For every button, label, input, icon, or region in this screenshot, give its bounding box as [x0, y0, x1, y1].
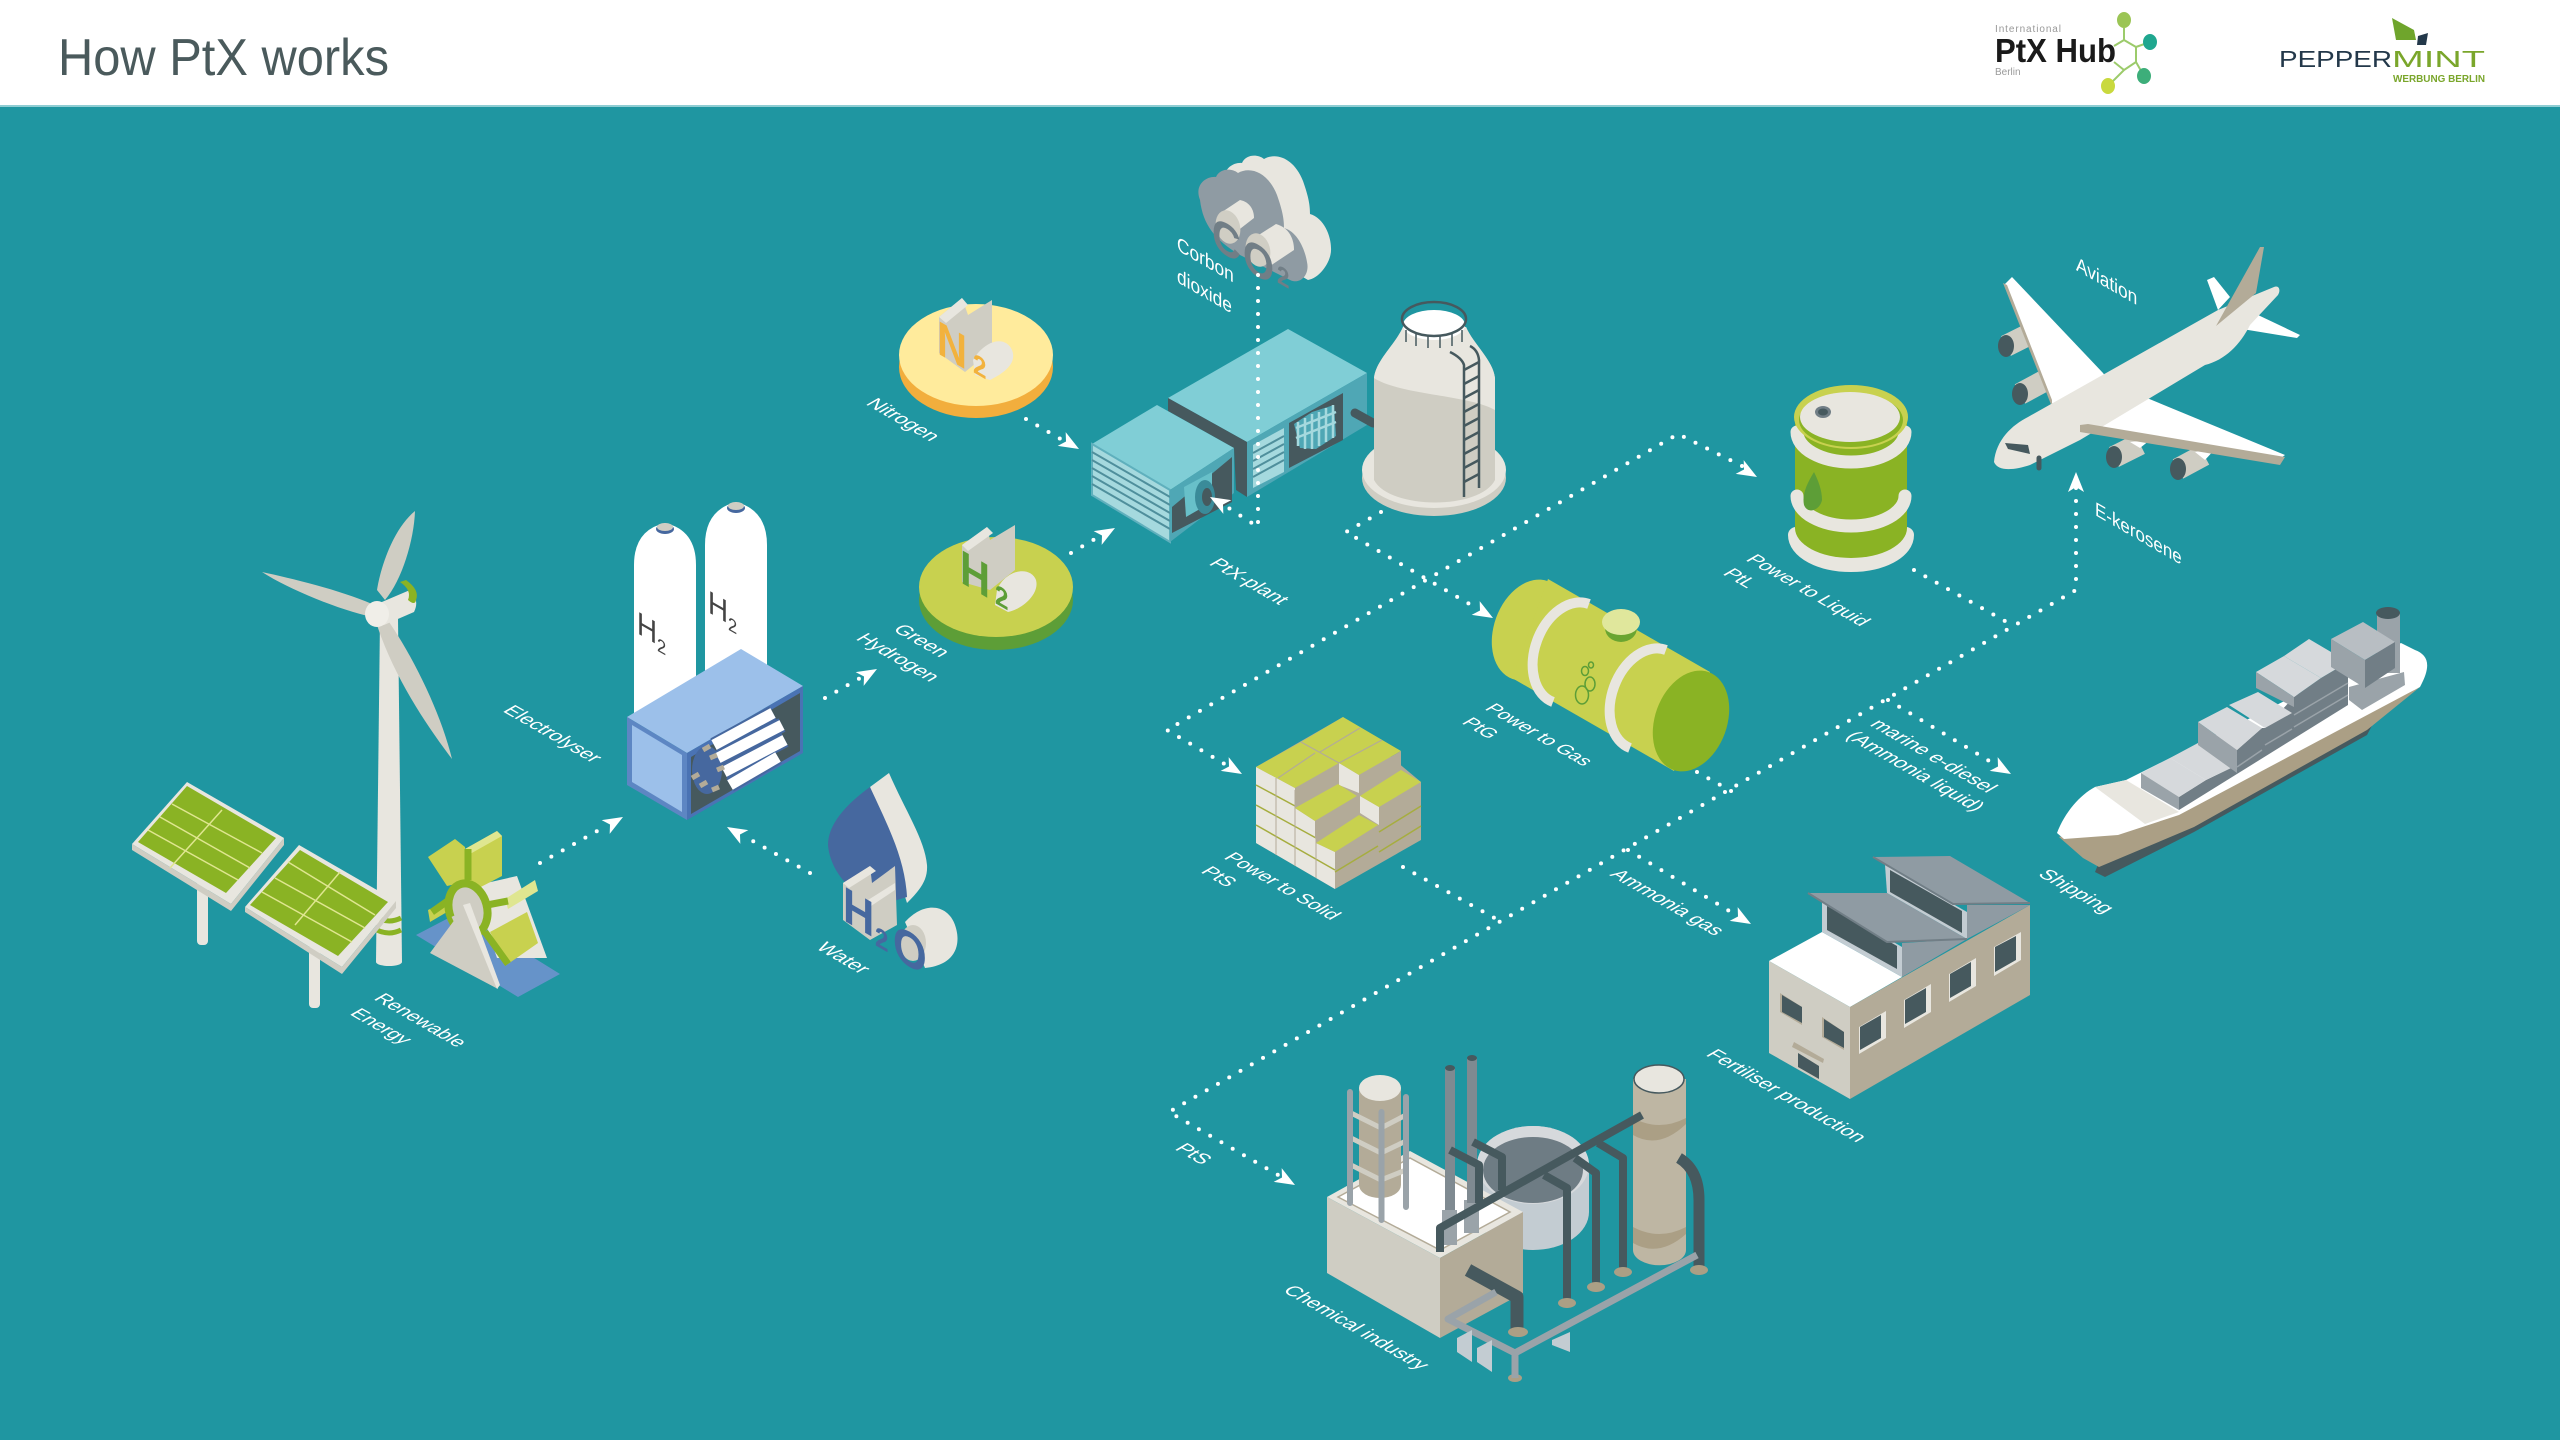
- icon: solid block cube: [1256, 717, 1421, 889]
- label: Carbon dioxide: [1177, 233, 1234, 319]
- icon: storage tank: [1362, 302, 1506, 516]
- label: PtX-plant: PtX-plant: [1204, 555, 1294, 608]
- icon: wind turbine: [262, 511, 452, 966]
- label: marine e-diesel (Ammonia liquid): (Ammonia liquid): [1841, 728, 1990, 814]
- icon: nitrogen disc: 2: [973, 347, 986, 386]
- icon: fertiliser factory: [1769, 856, 2030, 1099]
- icon: water drop H2O: [828, 773, 957, 987]
- icon: nitrogen disc: N: [937, 311, 967, 381]
- label: Renewable Energy: Renewable: [369, 990, 472, 1050]
- icon: nitrogen disc: [899, 298, 1053, 418]
- label: Power to Gas PtG: PtG: [1457, 715, 1503, 742]
- logo: Peppermint: WERBUNG BERLIN: [2393, 74, 2485, 85]
- label: Water: Water: [811, 939, 876, 977]
- icon: solar panel front: [245, 845, 396, 974]
- logo: PtX Hub: Berlin: [1995, 67, 2021, 78]
- icon: water wheel: [416, 831, 560, 997]
- label: Nitrogen: Nitrogen: [861, 395, 945, 444]
- label: Carbon dioxide: dioxide: [1177, 265, 1232, 319]
- label: Green Hydrogen: Hydrogen: [851, 630, 945, 685]
- icon: CO2 cloud: O: [1243, 226, 1274, 296]
- label: Power to Solid PtS: Power to Solid: [1219, 849, 1346, 923]
- label: Power to Solid PtS: PtS: [1196, 863, 1242, 890]
- icon: fuel barrel: [1794, 385, 1908, 564]
- icon: solar panels: [132, 782, 320, 1008]
- icon: green hydrogen disc: H: [960, 540, 990, 610]
- label: Green Hydrogen: Green: [888, 621, 955, 660]
- icon: water drop H2O: H: [843, 875, 874, 949]
- icon: airplane: [1994, 247, 2300, 480]
- icon: CO2 cloud: C: [1212, 205, 1241, 274]
- label: Shipping: Shipping: [2033, 866, 2119, 916]
- logo: Peppermint: [2279, 18, 2485, 85]
- logo: Peppermint: PEPPER: [2279, 46, 2392, 72]
- logo: Peppermint: MINT: [2392, 46, 2485, 72]
- label: Aviation: Aviation: [2076, 253, 2137, 310]
- logo: PtX Hub: [1995, 12, 2157, 94]
- flow: water to electrolyser: [723, 820, 810, 873]
- label: Ammonia gas: Ammonia gas: [1605, 866, 1730, 939]
- icon: hydrogen cylinders: 2: [728, 614, 737, 640]
- icon: container ship: [2057, 607, 2427, 877]
- title: How PtX works: [58, 29, 389, 87]
- logo: PtX Hub: International: [1995, 24, 2061, 35]
- label: E-kerosene: E-kerosene: [2095, 498, 2182, 570]
- label: PtS (chemical route): PtS: [1170, 1140, 1217, 1168]
- icon: gas tank: [1478, 569, 1743, 782]
- flow: carbon dioxide to plant: [1206, 275, 1258, 527]
- icon: hydrogen cylinders: H: [708, 583, 728, 631]
- flow: electrolyser to green hydrogen: [825, 662, 881, 698]
- icon: chemical plant: [1327, 1055, 1708, 1382]
- label: Power to Liquid PtL: Power to Liquid: [1741, 551, 1875, 629]
- logo: PtX Hub: PtX Hub: [1995, 32, 2116, 69]
- icon: water drop H2O: O: [893, 912, 927, 987]
- label: Fertiliser production: Fertiliser production: [1701, 1046, 1872, 1145]
- flow: nitrogen to plant: [1026, 419, 1083, 456]
- label: Renewable Energy: Energy: [345, 1005, 417, 1047]
- icon: hydrogen cylinders: [634, 502, 767, 720]
- label: Carbon dioxide: Corbon: [1177, 233, 1234, 288]
- flow: green hydrogen to plant: [1071, 521, 1119, 553]
- label: marine e-diesel (Ammonia liquid): marine e-diesel: [1865, 716, 2002, 796]
- label: Chemical industry: Chemical industry: [1278, 1282, 1434, 1373]
- label: Power to Gas PtG: Power to Gas: [1480, 701, 1597, 769]
- icon: green hydrogen disc: 2: [995, 578, 1008, 617]
- label: Electrolyser: Electrolyser: [498, 702, 607, 766]
- flow: renewable energy to electrolyser: [540, 810, 627, 863]
- icon: green hydrogen disc: [919, 525, 1073, 650]
- label: Power to Liquid PtL: PtL: [1718, 565, 1762, 591]
- icon: hydrogen cylinders: H: [637, 604, 657, 652]
- icon: CO2 cloud: [1198, 156, 1331, 296]
- icon: water drop H2O: 2: [875, 920, 888, 959]
- icon: electrolyser box: [627, 649, 803, 820]
- icon: CO2 cloud: 2: [1277, 258, 1290, 295]
- icon: PtX plant: [1092, 329, 1373, 542]
- icon: hydrogen cylinders: 2: [657, 635, 666, 661]
- flow: main distribution network: [1167, 434, 2084, 1192]
